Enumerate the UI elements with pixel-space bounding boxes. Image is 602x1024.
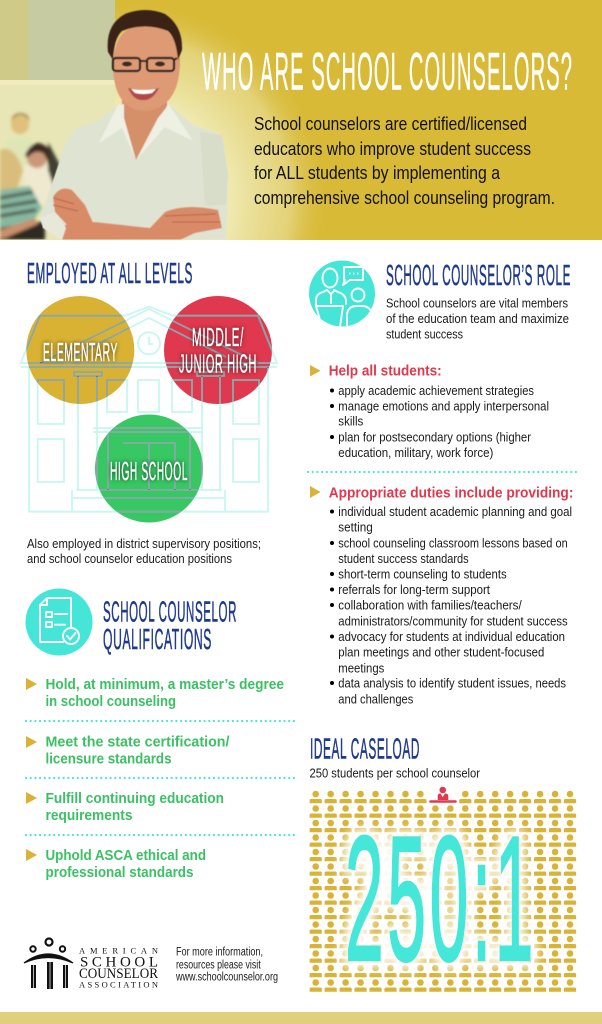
logo wordmark: COUNSELOR [79, 966, 158, 982]
logo wordmark [79, 945, 158, 990]
footer: more information [175, 947, 278, 984]
panel: ideal caseload: IDEAL CASELOAD [310, 733, 420, 765]
panel: school counselor qualifications: SCHOOL COUNSELOR [103, 597, 237, 629]
hero intro text: educators who improve student success [254, 138, 531, 159]
hero intro text: for ALL students by implementing a [254, 162, 501, 183]
qualification: ethical standards: professional standards [46, 864, 194, 881]
panel: school counselor's role [308, 260, 577, 706]
circle: high school [95, 414, 203, 522]
list: help all students: manage emotions and apply interpersonal [338, 398, 549, 413]
list: help all students: apply academic achievement strategies [338, 383, 534, 398]
qualification: ethical standards: Uphold ASCA ethical and [46, 847, 206, 864]
bottom band [0, 1012, 602, 1024]
qualification: continuing education: Fulfill continuing education [46, 790, 224, 807]
hair [108, 10, 182, 60]
note: other positions [27, 536, 261, 566]
pictogram: grid of students [310, 787, 576, 992]
list: appropriate duties: referrals for long-term support [338, 582, 490, 597]
icon: counselor at desk [429, 787, 457, 803]
list: appropriate duties: short-term counseling to students [338, 567, 507, 582]
icon: counselor with student [309, 260, 375, 330]
label: middle/junior high: MIDDLE/ [192, 322, 244, 352]
role description [386, 296, 569, 341]
list: appropriate duties: school counseling classroom lessons based on [338, 535, 568, 550]
photo: counselor [40, 10, 228, 240]
label: middle/junior high [179, 322, 257, 379]
list: appropriate duties: and challenges [338, 691, 414, 706]
icon: checklist document [26, 588, 92, 656]
qualification: master's degree [26, 676, 284, 710]
panel: employed at all levels: ELEMENTARY [43, 337, 118, 367]
panel: employed at all levels [21, 258, 277, 566]
collar [99, 104, 136, 160]
list: help all students: Help all students: [329, 363, 442, 380]
list: appropriate duties: setting [338, 520, 373, 535]
footer: more information: For more information, [176, 947, 263, 959]
list: appropriate duties: meetings [338, 660, 385, 675]
panel: employed at all levels: HIGH SCHOOL [110, 456, 188, 486]
caseload caption: 250 students per school counselor [310, 766, 481, 781]
panel: employed at all levels: JUNIOR HIGH [179, 349, 257, 379]
note: other positions: and school counselor education positions [27, 551, 232, 566]
qualification: continuing education: requirements [46, 807, 132, 824]
role description: School counselors are vital members [386, 296, 568, 311]
heading: school counselor qualifications [103, 597, 237, 656]
hero intro text: School counselors are certified/licensed [254, 113, 527, 134]
list: appropriate duties: collaboration with families/teachers/ [338, 598, 522, 613]
list: appropriate duties: data analysis to identify student issues, needs [338, 676, 566, 691]
list: appropriate duties: individual student academic planning and goal [338, 504, 572, 519]
qualification: state certification [26, 734, 230, 768]
logo wordmark: AMERICAN [79, 945, 158, 955]
qualification: master's degree: Hold, at minimum, a master’s degree [46, 676, 284, 693]
logo wordmark: SCHOOL [80, 955, 158, 971]
panel: employed at all levels: EMPLOYED AT ALL LEVELS [27, 258, 193, 290]
qualification: continuing education [26, 790, 224, 824]
hero intro text [254, 113, 555, 208]
building outline illustration [21, 307, 277, 512]
logo mark [24, 938, 73, 989]
hero background [0, 0, 602, 240]
list: appropriate duties: Appropriate duties include providing: [329, 484, 573, 501]
list: appropriate duties [310, 484, 573, 706]
crossed arms [53, 189, 94, 228]
list: help all students [310, 363, 549, 460]
footer: ASCA logo [24, 938, 158, 990]
list: appropriate duties: administrators/community for student success [338, 613, 568, 628]
list: help all students: skills [338, 414, 364, 429]
hero intro text: comprehensive school counseling program. [254, 187, 555, 208]
footer: more information: www.schoolcounselor.org [175, 972, 278, 984]
note: other positions: Also employed in district supervisory positions; [27, 536, 261, 551]
heading: school counselor qualifications: QUALIFICATIONS [103, 624, 212, 656]
logo wordmark: ASSOCIATION [79, 980, 158, 990]
list: help all students: plan for postsecondary options (higher [338, 430, 532, 445]
face [113, 24, 180, 111]
list: appropriate duties: plan meetings and other student-focused [338, 645, 544, 660]
qualification: ethical standards [26, 847, 206, 881]
role description: student success [386, 326, 463, 341]
neck [122, 98, 168, 160]
list: help all students: education, military, work force) [338, 445, 493, 460]
photo: students in background [0, 113, 60, 240]
circle: elementary [26, 296, 134, 404]
qualification: state certification: licensure standards [46, 751, 172, 768]
shirt [40, 103, 228, 240]
list: appropriate duties: student success standards [338, 551, 469, 566]
qualification: state certification: Meet the state certification/ [46, 734, 230, 751]
circle: middle/junior high [164, 296, 272, 404]
role description: of the education team and maximize [386, 311, 569, 326]
qualification: master's degree: in school counseling [46, 693, 176, 710]
hero banner [0, 0, 602, 240]
panel: school counselor qualifications [26, 588, 294, 881]
list: appropriate duties: advocacy for students at individual education [338, 629, 565, 644]
panel: ideal caseload [310, 733, 576, 998]
footer: more information: resources please visit [176, 959, 261, 971]
